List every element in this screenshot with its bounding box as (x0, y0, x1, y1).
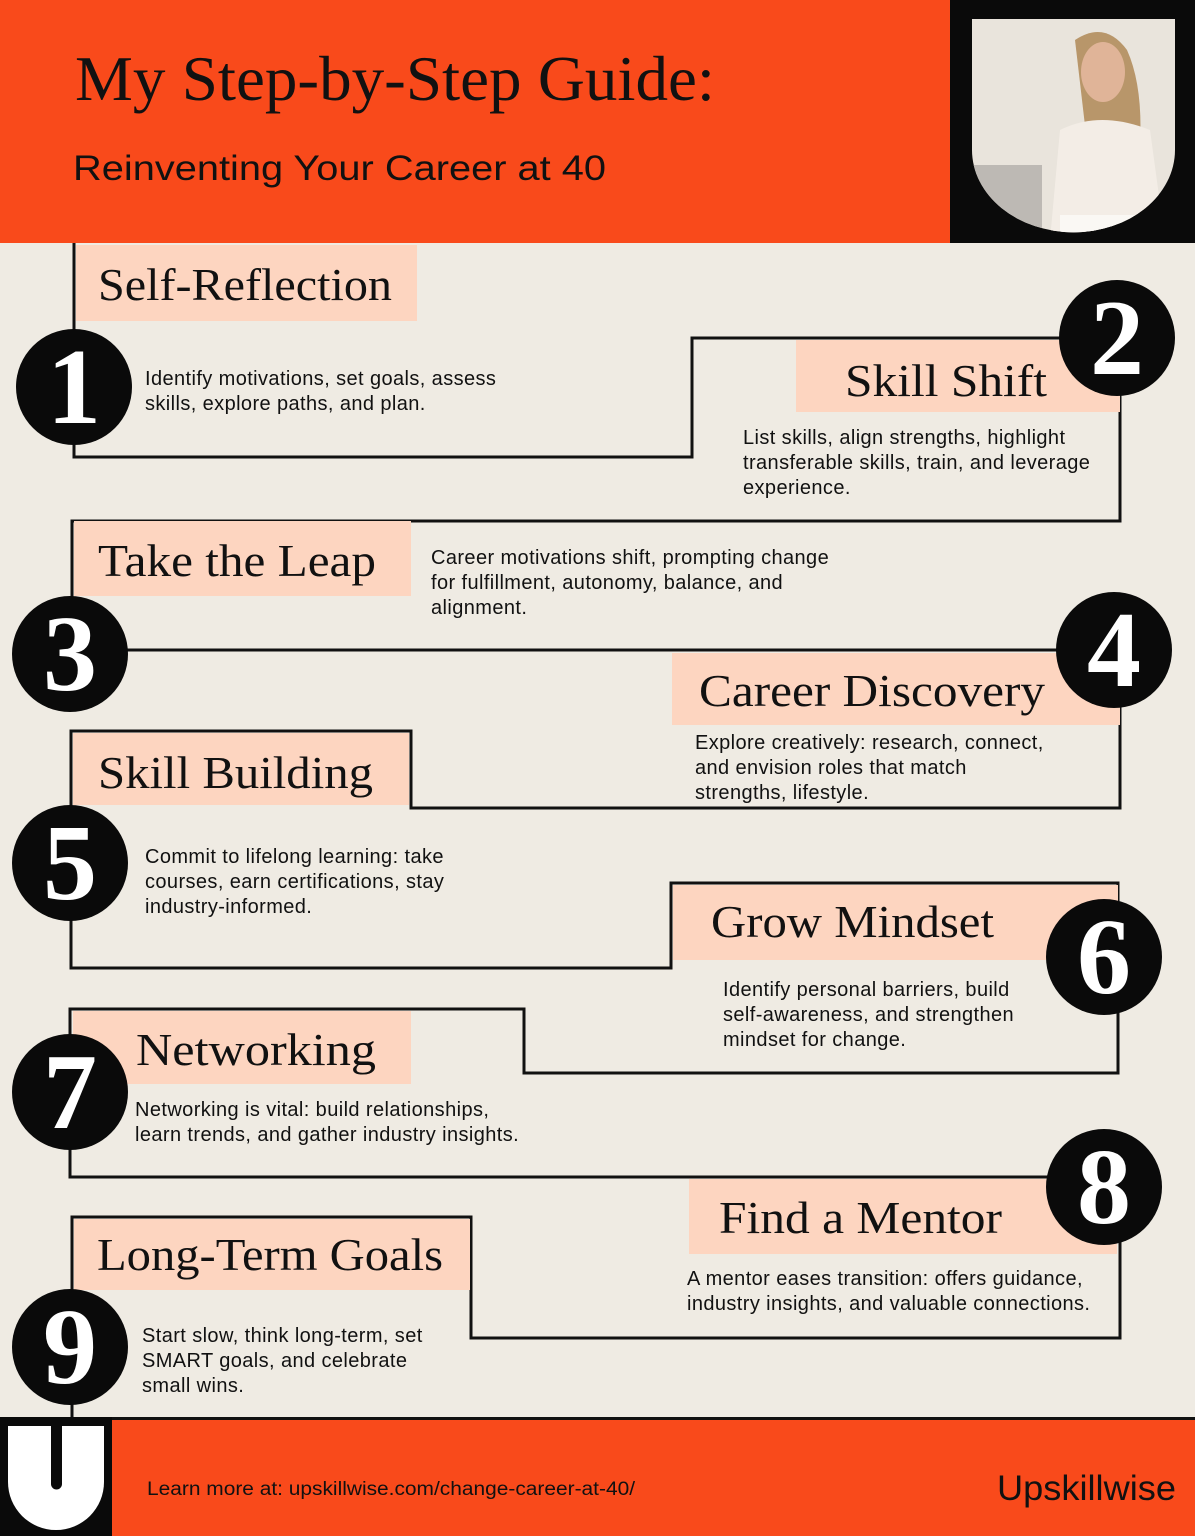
step 2: List skills, align strengths, highlight (743, 427, 1065, 449)
path line (70, 243, 1120, 1419)
step 9 (12, 1219, 470, 1407)
step 2: experience. (743, 477, 851, 499)
step 6: self-awareness, and strengthen (723, 1004, 1014, 1026)
step 6: Identify personal barriers, build (723, 979, 1010, 1001)
step 2: 2 (1090, 279, 1144, 398)
title: My Step-by-Step Guide: (75, 43, 715, 114)
header banner (0, 0, 1195, 243)
step 3: Take the Leap (98, 535, 376, 586)
footer link: Learn more at: upskillwise.com/change-career-at-40/ (147, 1479, 636, 1500)
step 2: transferable skills, train, and leverage (743, 452, 1090, 474)
step 9: small wins. (142, 1375, 244, 1397)
step 1 (16, 245, 496, 447)
step 6: Grow Mindset (711, 896, 994, 947)
step 8: industry insights, and valuable connections. (687, 1293, 1090, 1315)
step 4: 4 (1087, 591, 1141, 710)
step 9: Start slow, think long-term, set (142, 1325, 423, 1347)
step 5: industry-informed. (145, 896, 312, 918)
step 5: Commit to lifelong learning: take (145, 846, 444, 868)
step 8: A mentor eases transition: offers guidance, (687, 1268, 1083, 1290)
step 7: 7 (43, 1033, 97, 1152)
step 3: for fulfillment, autonomy, balance, and (431, 572, 783, 594)
step 9: 9 (43, 1288, 97, 1407)
step 6: 6 (1077, 898, 1131, 1017)
step 9: SMART goals, and celebrate (142, 1350, 407, 1372)
step 1: skills, explore paths, and plan. (145, 393, 426, 415)
step 5: courses, earn certifications, stay (145, 871, 444, 893)
logo: U (0, 1417, 112, 1536)
step 1: Self-Reflection (98, 259, 392, 310)
step 2 (743, 279, 1175, 499)
step 1: Identify motivations, set goals, assess (145, 368, 496, 390)
step 4: and envision roles that match (695, 757, 967, 779)
step 9: Long-Term Goals (97, 1229, 443, 1280)
photo: woman at laptop (950, 0, 1195, 243)
step 3: alignment. (431, 597, 527, 619)
step 5: 5 (43, 804, 97, 923)
footer (0, 1417, 1195, 1536)
step 3 (12, 521, 829, 714)
step 4: Career Discovery (699, 665, 1045, 716)
step 7: learn trends, and gather industry insights. (135, 1124, 519, 1146)
step 6 (673, 885, 1162, 1051)
subtitle: Reinventing Your Career at 40 (73, 149, 606, 188)
step 8: Find a Mentor (719, 1192, 1002, 1243)
step 1: 1 (47, 328, 101, 447)
step 8: 8 (1077, 1128, 1131, 1247)
step 5 (12, 733, 444, 923)
step 7 (12, 1011, 519, 1152)
step 7: Networking is vital: build relationships, (135, 1099, 489, 1121)
step 6: mindset for change. (723, 1029, 906, 1051)
step 4: strengths, lifestyle. (695, 782, 869, 804)
step 2: Skill Shift (845, 355, 1047, 406)
step 4: Explore creatively: research, connect, (695, 732, 1044, 754)
step 8 (687, 1128, 1162, 1315)
brand name: Upskillwise (997, 1469, 1176, 1508)
step 3: 3 (43, 595, 97, 714)
step 7: Networking (136, 1024, 376, 1075)
step 4 (672, 591, 1172, 804)
step 5: Skill Building (98, 747, 373, 798)
step 3: Career motivations shift, prompting change (431, 547, 829, 569)
